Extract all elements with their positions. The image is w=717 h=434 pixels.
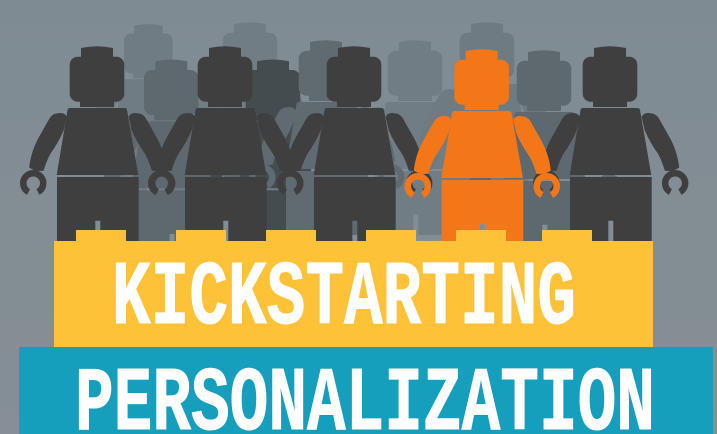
figure: back row right — [413, 22, 562, 217]
figure: back row centre — [176, 22, 325, 217]
figure: dark mid row — [199, 60, 348, 254]
figure: front 2 — [151, 46, 300, 241]
figure: orange highlighted — [408, 49, 557, 244]
yellow brick — [54, 230, 653, 347]
front row of figures — [23, 46, 685, 244]
figure: front 5 — [536, 46, 685, 241]
teal brick — [19, 347, 713, 434]
crowd of background figures — [83, 22, 619, 254]
figure: mid row right — [470, 50, 619, 245]
figure: mid row centre — [252, 40, 401, 235]
figure: back row far left — [83, 24, 215, 197]
figure: back row right of centre — [341, 40, 490, 235]
figure: front 3 — [280, 46, 429, 241]
figure: mid row left — [98, 60, 246, 254]
figure: front 1 — [23, 46, 172, 241]
